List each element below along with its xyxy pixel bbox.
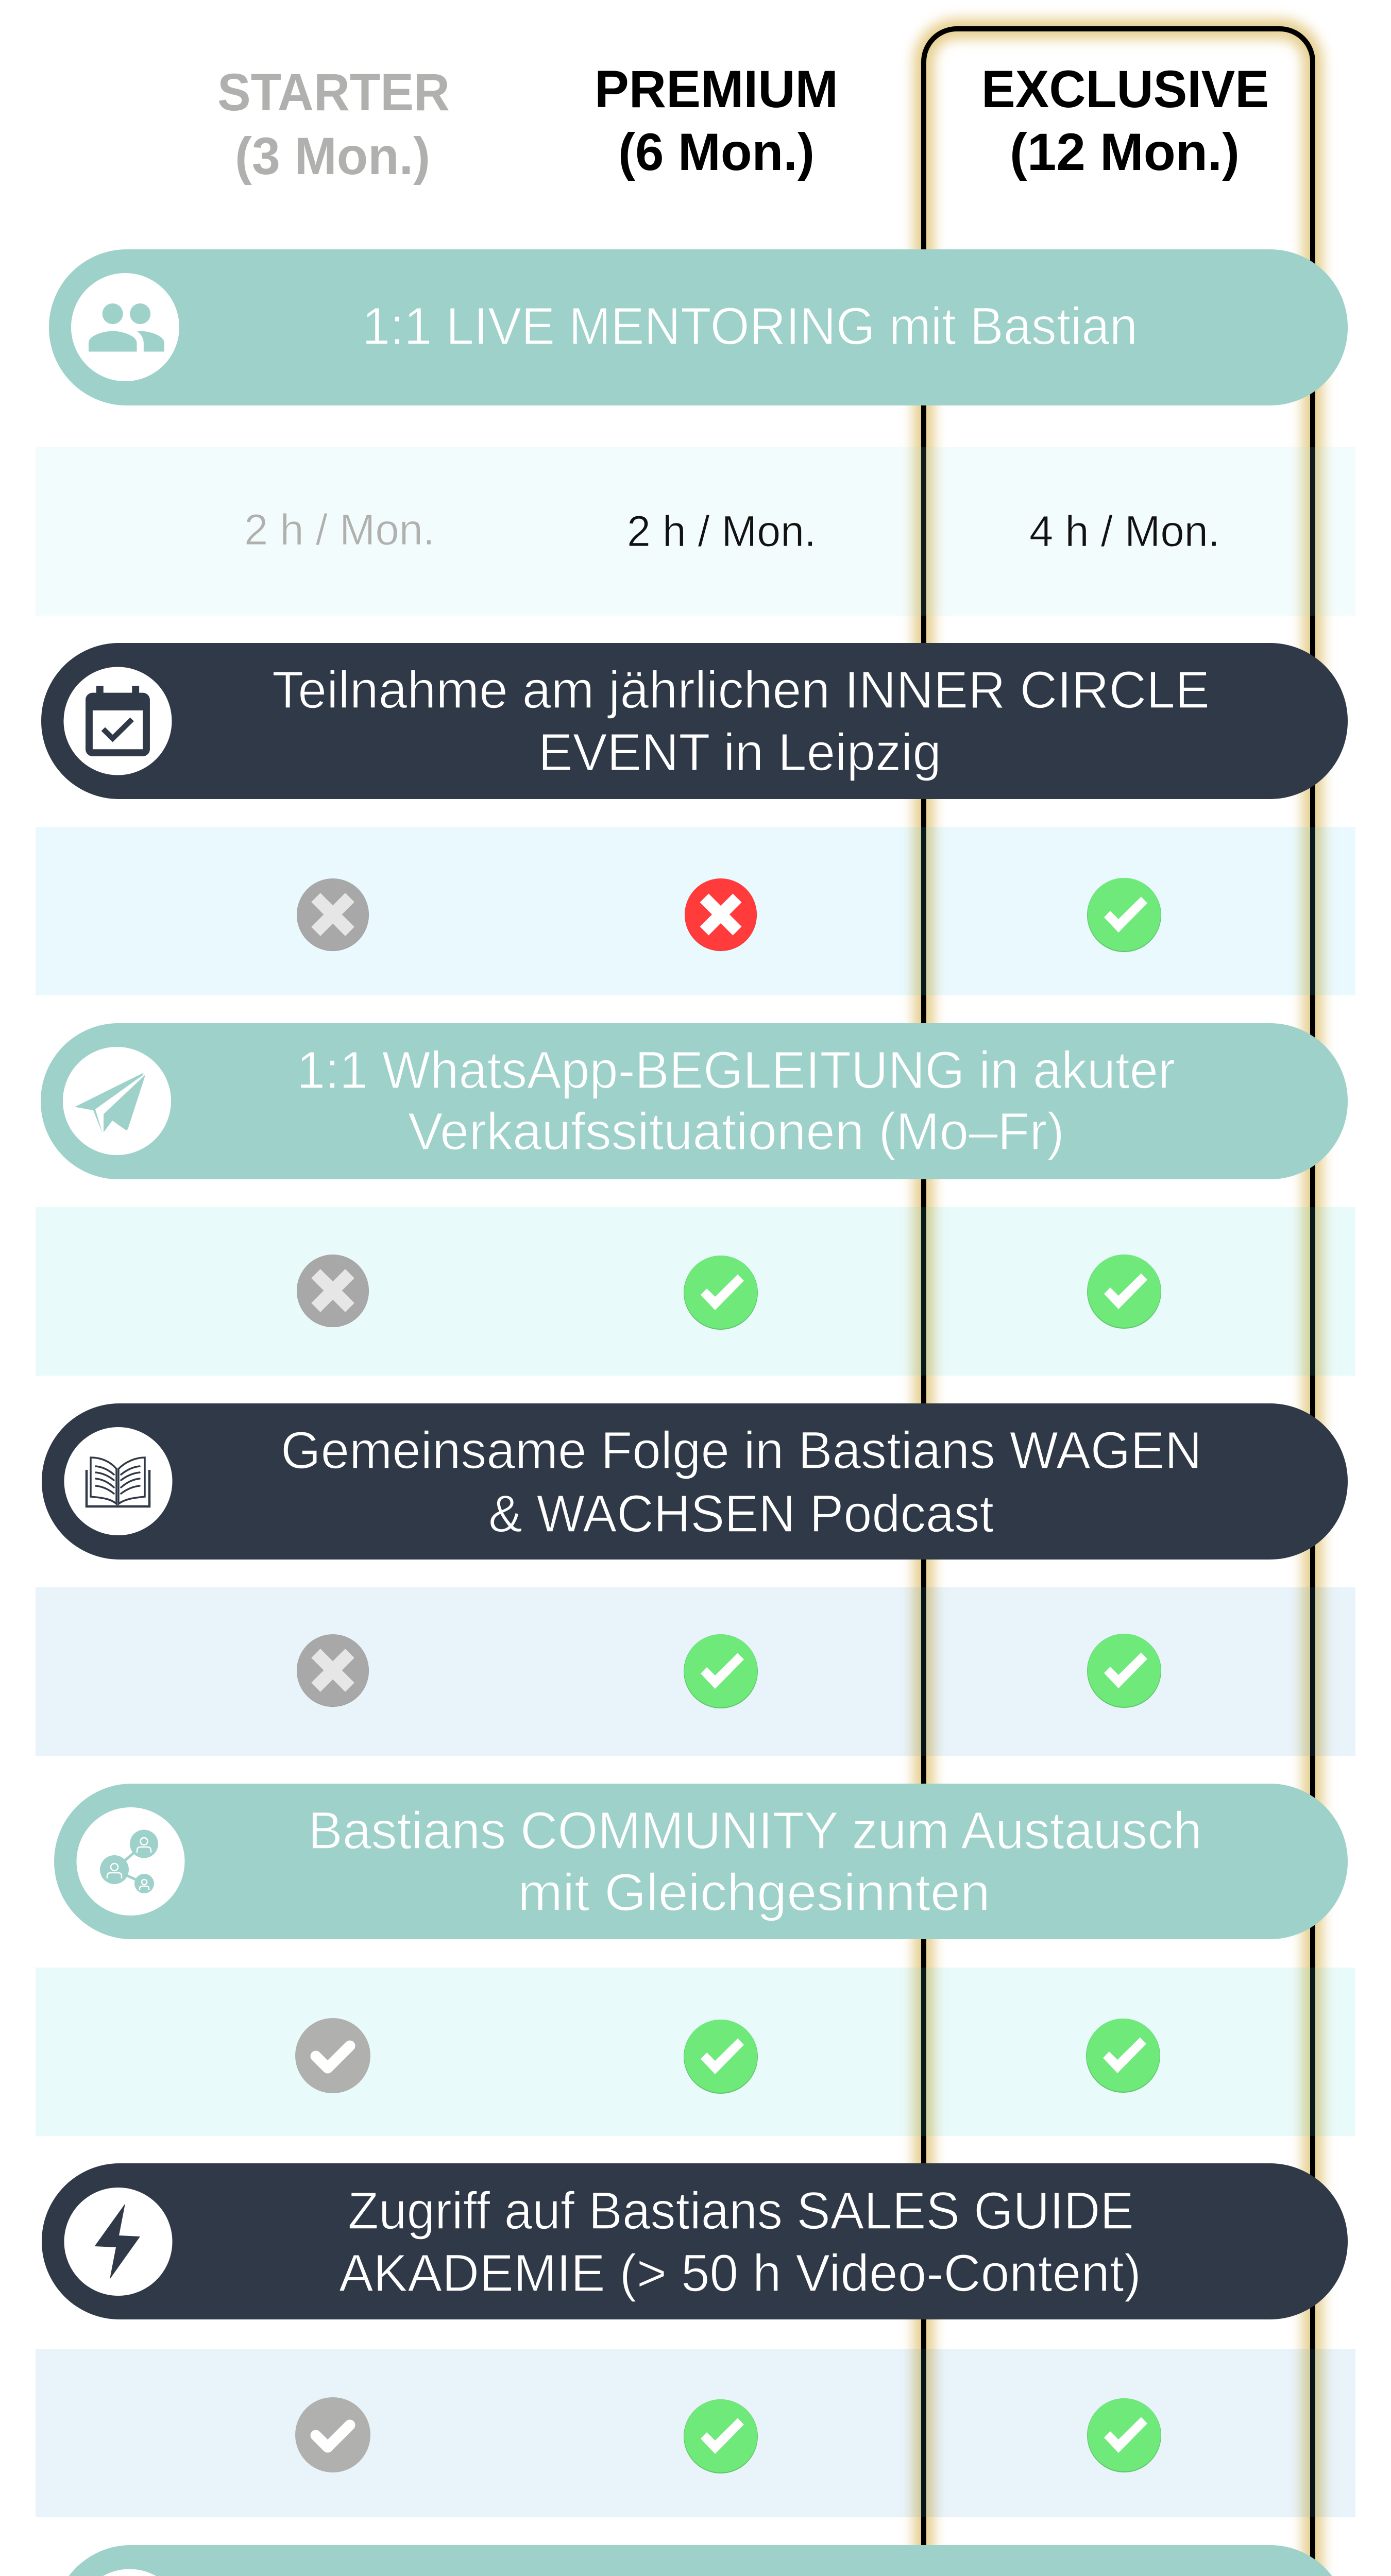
icon: calendar xyxy=(64,667,172,775)
banner text: Teilnahme am jährlichen INNER CIRCLE xyxy=(272,660,1210,719)
icon: people xyxy=(71,273,179,381)
header: starter: STARTER xyxy=(217,63,450,122)
banner text: Verkaufssituationen (Mo–Fr) xyxy=(408,1102,1064,1161)
banner 7: network xyxy=(53,2545,1348,2576)
banner 4: podcast xyxy=(42,1403,1348,1560)
banner text: 1:1 LIVE MENTORING mit Bastian xyxy=(362,297,1138,355)
banner text: EVENT in Leipzig xyxy=(538,723,941,782)
banner text xyxy=(281,1421,1202,1543)
header: premium: PREMIUM xyxy=(595,60,838,118)
row 1: mentoring hours: 2 h / Mon. xyxy=(627,507,816,555)
icon: people network xyxy=(76,1807,184,1916)
header: exclusive: EXCLUSIVE xyxy=(981,60,1269,118)
banner 3: whatsapp support xyxy=(41,1023,1348,1179)
banner 1: live mentoring xyxy=(49,249,1348,405)
row 1: mentoring hours: 2 h / Mon. xyxy=(244,505,435,554)
row 4: podcast availability xyxy=(36,1587,1355,1756)
icon: lightning bolt xyxy=(64,2188,172,2296)
header: starter: (3 Mon.) xyxy=(235,127,430,185)
row 3: whatsapp availability xyxy=(36,1207,1355,1376)
highlighted exclusive column frame xyxy=(924,29,1313,2576)
header: exclusive xyxy=(981,60,1269,181)
row 6: akademie availability xyxy=(36,2349,1355,2517)
banner text xyxy=(308,1801,1202,1922)
header: exclusive: (12 Mon.) xyxy=(1010,123,1240,181)
icon: heart speech bubble xyxy=(75,2569,183,2576)
banner 5: community xyxy=(54,1784,1348,1939)
header: starter xyxy=(217,63,450,185)
banner text: Zugriff auf Bastians SALES GUIDE xyxy=(348,2181,1134,2240)
banner text: 1:1 WhatsApp-BEGLEITUNG in akuter xyxy=(297,1041,1175,1099)
icon: open book xyxy=(64,1427,172,1535)
row 1: mentoring hours xyxy=(36,447,1355,616)
banner text xyxy=(297,1041,1175,1161)
banner 2: inner circle event xyxy=(41,643,1348,799)
banner text xyxy=(339,2181,1141,2302)
header: premium xyxy=(595,60,838,181)
header: premium: (6 Mon.) xyxy=(618,123,815,181)
column headers xyxy=(217,60,1269,185)
row 1: mentoring hours: 4 h / Mon. xyxy=(1029,507,1220,555)
banner text: Gemeinsame Folge in Bastians WAGEN xyxy=(281,1421,1202,1480)
banner text: & WACHSEN Podcast xyxy=(488,1484,994,1543)
banner text: Bastians COMMUNITY zum Austausch xyxy=(308,1801,1202,1860)
row 2: event availability xyxy=(36,827,1355,995)
banner 6: sales guide akademie xyxy=(42,2163,1348,2319)
banner text: mit Gleichgesinnten xyxy=(518,1863,990,1922)
banner text xyxy=(272,660,1210,782)
icon: paper plane xyxy=(63,1047,171,1155)
row 5: community availability xyxy=(36,1968,1355,2136)
banner text: AKADEMIE (> 50 h Video-Content) xyxy=(339,2244,1141,2302)
